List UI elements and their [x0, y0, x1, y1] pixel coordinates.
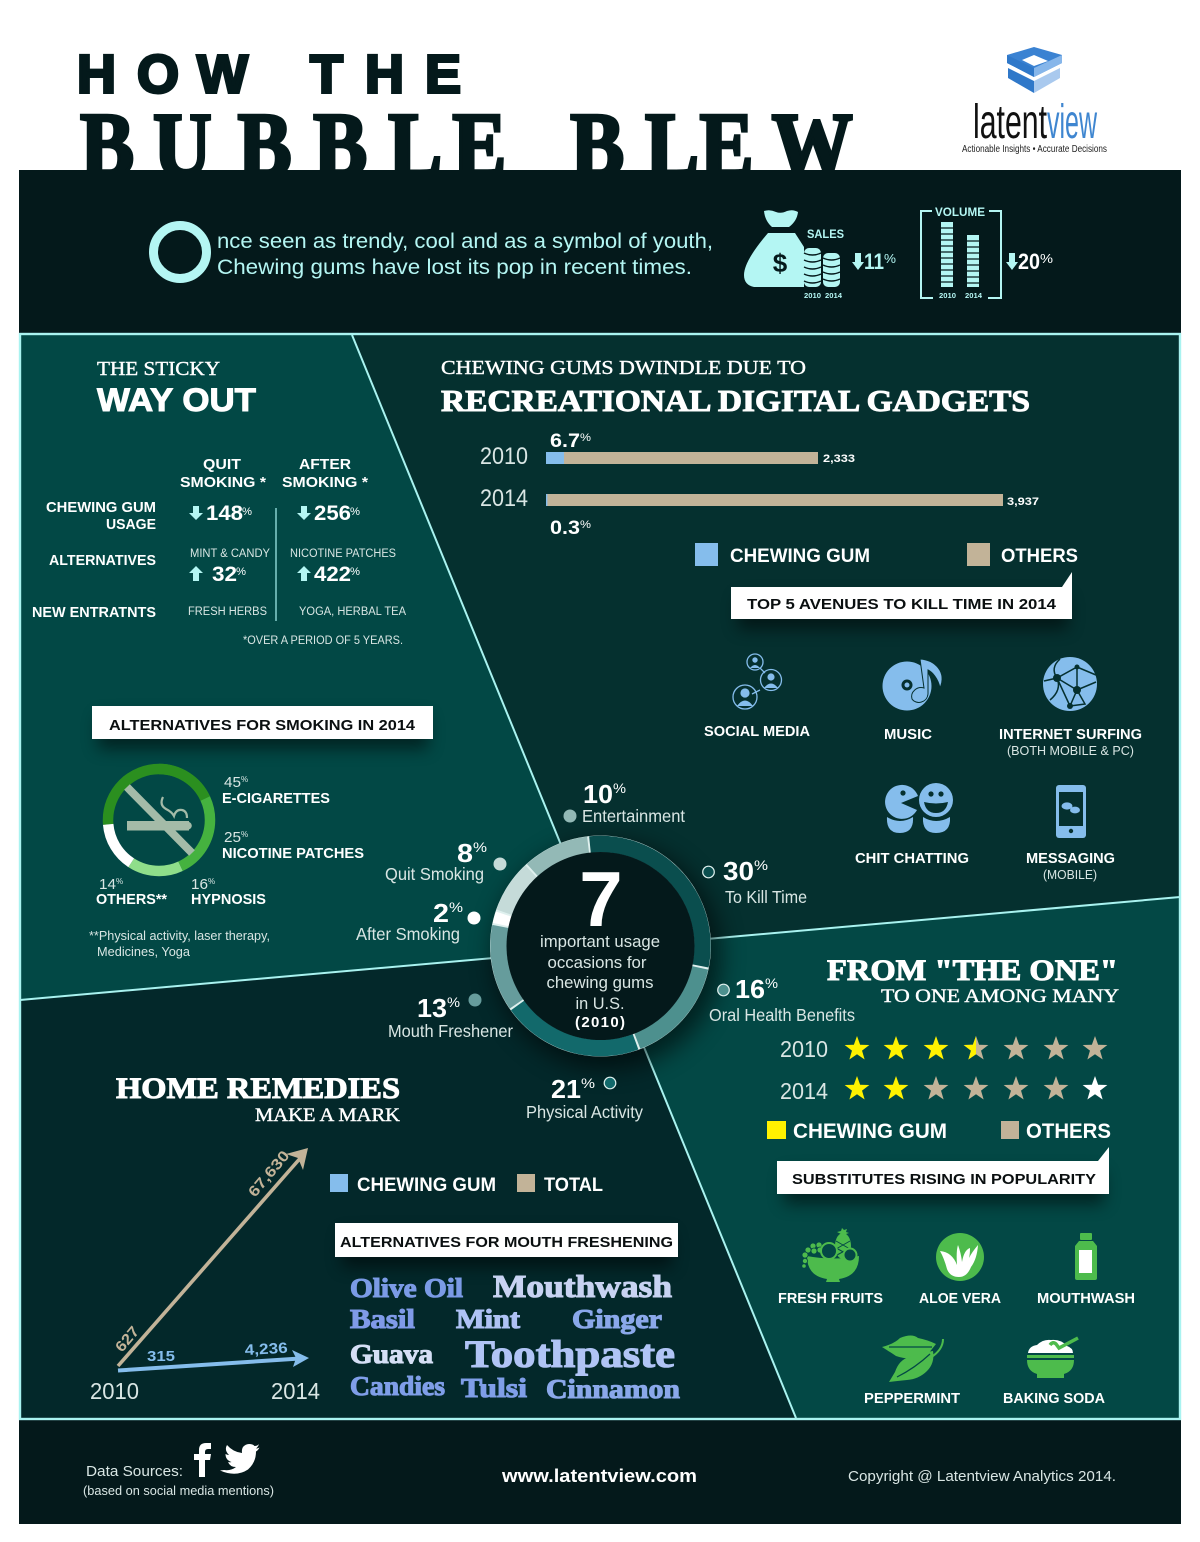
donut chart: no smoking [108, 769, 210, 871]
label: 16% oral health benefits: Oral Health Benefits [709, 1005, 855, 1025]
label: 16% oral health benefits: % [765, 975, 778, 991]
volume bars [921, 205, 1001, 300]
donut legend: NICOTINE PATCHES [222, 845, 364, 862]
panel: recreational digital gadgets [441, 357, 1142, 882]
data sources [83, 1463, 274, 1498]
sales change [852, 249, 896, 274]
star legend: OTHERS [1026, 1120, 1111, 1143]
label: messaging [1026, 851, 1115, 882]
heading [441, 357, 1030, 418]
volume change [1006, 249, 1053, 274]
icon: fresh fruits [802, 1228, 859, 1282]
volume bars: 2010 [939, 291, 956, 300]
label: 2% after smoking [356, 898, 480, 944]
drop cap O [154, 226, 206, 278]
volume bars: VOLUME [935, 205, 985, 219]
donut legend: **Physical activity, laser therapy, [89, 928, 270, 943]
label: 8% quit smoking: % [473, 839, 487, 855]
arrow chart: 315 [147, 1348, 175, 1365]
label: mouthwash: MOUTHWASH [1037, 1291, 1135, 1307]
donut legend: % [208, 877, 215, 886]
label: 21% physical activity [526, 1074, 643, 1122]
logo: LatentView [962, 47, 1107, 155]
comparison table: SMOKING * [282, 474, 368, 491]
comparison table: AFTER [299, 456, 351, 473]
label: music: MUSIC [884, 727, 933, 743]
label: 2% after smoking: % [449, 899, 463, 915]
icon: social media [733, 654, 782, 709]
label: 13% mouth freshener: % [447, 994, 460, 1010]
icon: mouthwash [1075, 1233, 1097, 1280]
bar chart: 6.7 [550, 431, 580, 452]
arrow chart: 67,630 [245, 1148, 293, 1201]
arrow legend: CHEWING GUM [357, 1175, 496, 1196]
label: 30% to kill time: To Kill Time [725, 887, 807, 907]
word cloud: Mouthwash [493, 1268, 672, 1304]
icon: peppermint [882, 1336, 943, 1382]
volume change: % [1040, 251, 1053, 266]
arrow chart [90, 1148, 320, 1404]
icon: money bag and coins: 2014 [825, 291, 843, 300]
callout: top 5 avenues: TOP 5 AVENUES TO KILL TIME IN 2014 [747, 596, 1057, 613]
label: 16% oral health benefits: 16 [735, 974, 765, 1004]
heading: CHEWING GUMS DWINDLE DUE TO [441, 357, 806, 379]
centre text: 7 [579, 855, 623, 943]
centre text: (2010) [575, 1014, 625, 1031]
label: baking soda: BAKING SODA [1003, 1391, 1106, 1407]
comparison table: % [350, 506, 360, 518]
donut legend: 14 [99, 876, 116, 893]
label: chit chatting: CHIT CHATTING [855, 851, 969, 867]
label: 13% mouth freshener: 13 [417, 993, 447, 1023]
ring shadow [493, 841, 721, 1069]
label: 10% entertainment: 10 [583, 779, 613, 809]
volume bars: 2014 [965, 291, 983, 300]
intro text [217, 230, 713, 279]
comparison table: *OVER A PERIOD OF 5 YEARS. [243, 635, 403, 647]
bar chart: 2014 [480, 485, 528, 512]
bar chart: 0.3 [550, 518, 580, 539]
donut legend [89, 774, 364, 959]
copyright: Copyright @ Latentview Analytics 2014. [848, 1468, 1116, 1485]
centre text: chewing gums [546, 973, 654, 992]
panel: the sticky way out [32, 358, 433, 959]
callout: substitutes: SUBSTITUTES RISING IN POPULARITY [792, 1171, 1096, 1188]
word cloud: Candies [350, 1371, 445, 1401]
label: peppermint: PEPPERMINT [864, 1391, 960, 1407]
panel: home remedies [90, 1072, 680, 1404]
arrow chart: 4,236 [244, 1340, 288, 1359]
label: 2% after smoking: 2 [433, 898, 449, 928]
icon: baking soda [1027, 1338, 1078, 1378]
label: internet surfing: (BOTH MOBILE & PC) [1007, 743, 1134, 758]
comparison table: ALTERNATIVES [49, 552, 156, 569]
label: messaging: MESSAGING [1026, 851, 1115, 867]
comparison table: CHEWING GUM [46, 499, 156, 516]
icon: globe network [1043, 657, 1097, 711]
title [77, 44, 853, 196]
bar chart: 2010 [480, 443, 528, 470]
callout: substitutes [777, 1147, 1109, 1204]
word cloud: Toothpaste [465, 1333, 675, 1376]
label: 21% physical activity: Physical Activity [526, 1102, 643, 1122]
label: 10% entertainment: Entertainment [582, 806, 685, 826]
sales change: 11 [864, 249, 884, 274]
donut legend: HYPNOSIS [191, 891, 266, 908]
label: 13% mouth freshener [388, 993, 513, 1041]
donut legend: % [241, 775, 248, 784]
star rating chart: 2014 [780, 1078, 828, 1104]
heading: TO ONE AMONG MANY [881, 986, 1119, 1007]
label: fresh fruits: FRESH FRUITS [778, 1291, 883, 1307]
comparison table: NICOTINE PATCHES [290, 548, 396, 560]
arrow chart: 627 [112, 1323, 143, 1356]
callout: top 5 avenues [731, 572, 1072, 629]
donut legend: % [241, 830, 248, 839]
comparison table: FRESH HERBS [188, 606, 267, 618]
comparison table: 148 [206, 502, 243, 525]
heading: FROM "THE ONE" [827, 954, 1118, 987]
panel: usage occasions ring [356, 779, 855, 1122]
icon: twitter [220, 1444, 260, 1474]
label: 21% physical activity: 21 [551, 1074, 581, 1104]
icon: chit chatting [885, 783, 953, 833]
title: HOW THE [77, 44, 461, 104]
comparison table: USAGE [106, 516, 156, 533]
bar legend: CHEWING GUM [730, 546, 870, 567]
donut legend: Medicines, Yoga [97, 944, 191, 959]
donut legend: % [116, 877, 123, 886]
label: 13% mouth freshener: Mouth Freshener [388, 1021, 513, 1041]
data sources: Data Sources: [86, 1463, 183, 1480]
centre text: important usage [540, 932, 660, 951]
website: www.latentview.com [501, 1465, 697, 1486]
footer [83, 1443, 1116, 1498]
word cloud: Tulsi [461, 1373, 528, 1403]
donut chart: 7 occasions [489, 835, 712, 1057]
comparison table: 256 [314, 502, 351, 525]
icon: money bag and coins [744, 210, 844, 300]
word cloud [350, 1268, 680, 1404]
icon: aloe vera [936, 1233, 984, 1281]
bar legend: OTHERS [1001, 546, 1078, 567]
word cloud: Olive Oil [350, 1273, 464, 1303]
intro band [154, 205, 1053, 300]
heading: HOME REMEDIES [116, 1072, 400, 1105]
label: 30% to kill time: 30 [723, 856, 754, 886]
label: messaging: (MOBILE) [1043, 867, 1097, 882]
bar chart: 3,937 [1007, 496, 1039, 508]
star rating chart [780, 1036, 1107, 1104]
bar chart: 2,333 [823, 453, 855, 465]
label: 21% physical activity: % [581, 1075, 595, 1091]
sales change: % [884, 251, 896, 266]
intro text: Chewing gums have lost its pop in recent times. [217, 256, 692, 279]
label: internet surfing: INTERNET SURFING [999, 727, 1142, 743]
logo: LatentView: latent [973, 94, 1047, 149]
comparison table: 422 [314, 563, 351, 586]
callout: alternatives for smoking [92, 706, 433, 749]
label: 2% after smoking: After Smoking [356, 924, 460, 944]
logo: LatentView: Actionable Insights • Accurate Decisions [962, 144, 1107, 155]
panel backgrounds [20, 334, 1180, 1419]
donut legend: OTHERS** [96, 891, 167, 908]
label: social media: SOCIAL MEDIA [704, 724, 811, 740]
heading: WAY OUT [97, 382, 256, 418]
word cloud: Mint [456, 1304, 520, 1334]
donut legend: 45 [224, 774, 241, 791]
icon: facebook [194, 1443, 211, 1477]
label: internet surfing [999, 727, 1142, 758]
star rating chart: 2010 [780, 1036, 828, 1062]
logo: LatentView: view [1047, 94, 1097, 149]
donut legend: 25 [224, 829, 241, 846]
arrow chart: 2010 [90, 1378, 139, 1404]
comparison table: SMOKING * [180, 474, 266, 491]
bar chart: % [580, 519, 591, 531]
label: 8% quit smoking: 8 [457, 838, 473, 868]
callout: mouth freshening: ALTERNATIVES FOR MOUTH FRESHENING [340, 1234, 673, 1251]
heading [97, 358, 256, 418]
comparison table: NEW ENTRATNTS [32, 604, 156, 621]
arrow legend [330, 1174, 603, 1196]
comparison table: % [350, 566, 360, 578]
star legend [767, 1120, 1111, 1143]
label: 10% entertainment: % [613, 780, 626, 796]
arrow chart: 2014 [271, 1378, 320, 1404]
icon: money bag and coins: $ [773, 248, 788, 278]
word cloud: Cinnamon [546, 1374, 680, 1404]
panel: from the one to one among many [767, 954, 1135, 1407]
bar legend [695, 543, 1078, 567]
heading: THE STICKY [97, 358, 220, 380]
icon: phone messaging [1056, 785, 1086, 838]
label: 30% to kill time: % [754, 857, 768, 873]
comparison table: % [236, 566, 246, 578]
centre text [540, 855, 660, 1031]
word cloud: Ginger [572, 1304, 662, 1334]
label: aloe vera: ALOE VERA [919, 1291, 1002, 1307]
donut legend: 16 [191, 876, 208, 893]
intro text: nce seen as trendy, cool and as a symbol of youth, [217, 230, 713, 253]
comparison table: QUIT [203, 456, 241, 473]
comparison table: YOGA, HERBAL TEA [299, 606, 406, 618]
centre text: occasions for [548, 953, 647, 972]
title: BUBBLE BLEW [80, 94, 853, 196]
label: 30% to kill time [703, 856, 807, 907]
label: 16% oral health benefits [709, 974, 855, 1025]
label: 8% quit smoking: Quit Smoking [385, 864, 484, 884]
icon: money bag and coins: 2010 [804, 291, 821, 300]
centre text: in U.S. [576, 994, 624, 1013]
star legend: CHEWING GUM [793, 1120, 947, 1143]
icon: music [882, 659, 942, 710]
comparison table [32, 456, 406, 647]
arrow legend: TOTAL [544, 1175, 603, 1196]
label: 8% quit smoking [385, 838, 506, 884]
callout: alternatives for smoking: ALTERNATIVES FOR SMOKING IN 2014 [109, 717, 416, 734]
word cloud: Basil [350, 1304, 416, 1334]
data sources: (based on social media mentions) [83, 1483, 274, 1498]
heading: MAKE A MARK [255, 1105, 400, 1126]
word cloud: Guava [350, 1339, 434, 1369]
heading: RECREATIONAL DIGITAL GADGETS [441, 383, 1030, 418]
label: 10% entertainment [564, 779, 685, 826]
bar chart: % [580, 432, 591, 444]
callout: mouth freshening [335, 1223, 678, 1267]
comparison table: % [242, 506, 252, 518]
icon: money bag and coins: SALES [807, 227, 844, 241]
bar chart [480, 431, 1039, 539]
heading [827, 954, 1119, 1007]
heading [116, 1072, 400, 1126]
volume change: 20 [1018, 249, 1040, 274]
comparison table: MINT & CANDY [190, 548, 270, 560]
comparison table: 32 [212, 563, 237, 586]
donut legend: E-CIGARETTES [222, 790, 330, 807]
